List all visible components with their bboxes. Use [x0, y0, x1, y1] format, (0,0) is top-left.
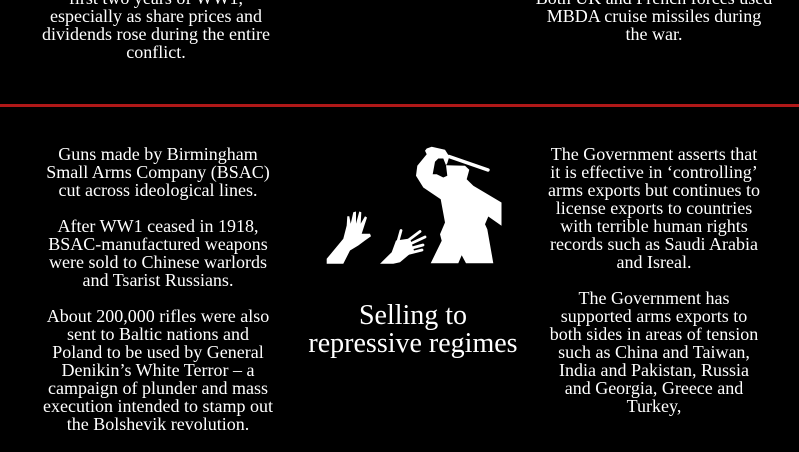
text block: left column, BSAC guns: execution intended to stamp out [43, 396, 273, 416]
text block: top left, share prices: especially as share prices and [50, 6, 262, 26]
text block: left column, BSAC guns: were sold to Chinese warlords [49, 252, 267, 272]
text block: left column, BSAC guns [43, 144, 273, 434]
text block: left column, BSAC guns: cut across ideological lines. [59, 180, 257, 200]
icon: baton [449, 156, 488, 170]
text block: top left, share prices: dividends rose during the entire [42, 24, 270, 44]
text block: right column, government arms exports: The Government asserts that [551, 144, 757, 164]
text block: left column, BSAC guns: About 200,000 rifles were also [47, 306, 269, 326]
text block: right column, government arms exports: and Isreal. [617, 252, 691, 272]
text block: top right, cruise missiles: the war. [626, 24, 682, 44]
text block: left column, BSAC guns: After WW1 ceased in 1918, [57, 216, 259, 236]
heading: selling to repressive regimes: Selling to [359, 300, 467, 331]
text block: right column, government arms exports: India and Pakistan, Russia [559, 360, 749, 380]
text block: right column, government arms exports: arms exports but continues to [548, 180, 760, 200]
text block: left column, BSAC guns: the Bolshevik revolution. [67, 414, 249, 434]
text block: right column, government arms exports: with terrible human rights [560, 216, 748, 236]
text block: right column, government arms exports: and Georgia, Greece and [565, 378, 743, 398]
text block: left column, BSAC guns: Guns made by Birmingham [58, 144, 258, 164]
text block: left column, BSAC guns: Poland to be used by General [52, 342, 264, 362]
text block: right column, government arms exports: Turkey, [627, 396, 681, 416]
text block: left column, BSAC guns: Denikin’s White Terror – a [61, 360, 255, 380]
text block: left column, BSAC guns: sent to Baltic nations and [67, 324, 249, 344]
text block: right column, government arms exports: supported arms exports to [561, 306, 747, 326]
red divider line [0, 104, 799, 107]
icon: police officer with baton and raised hands [326, 146, 502, 264]
icon: right raised hand [380, 230, 425, 264]
heading: selling to repressive regimes [308, 300, 518, 359]
text block: right column, government arms exports: license exports to countries [556, 198, 752, 218]
heading: selling to repressive regimes: repressive regimes [308, 328, 518, 359]
text block: left column, BSAC guns: BSAC-manufactured weapons [48, 234, 268, 254]
text block: top left, share prices [42, 0, 270, 62]
text block: right column, government arms exports: such as China and Taiwan, [558, 342, 750, 362]
text block: top left, share prices: conflict. [126, 42, 186, 62]
text block: right column, government arms exports: both sides in areas of tension [550, 324, 758, 344]
text block: left column, BSAC guns: campaign of plunder and mass [48, 378, 268, 398]
text block: right column, government arms exports: it is effective in ‘controlling’ [550, 162, 758, 182]
icon: left raised hand [327, 212, 371, 264]
text block: left column, BSAC guns: Small Arms Company (BSAC) [46, 162, 270, 182]
text block: top right, cruise missiles [536, 0, 772, 44]
text block: right column, government arms exports [548, 144, 760, 416]
text block: left column, BSAC guns: and Tsarist Russians. [83, 270, 233, 290]
text block: right column, government arms exports: The Government has [579, 288, 729, 308]
icon: officer silhouette [416, 147, 502, 263]
text block: top right, cruise missiles: MBDA cruise missiles during [547, 6, 761, 26]
text block: right column, government arms exports: records such as Saudi Arabia [550, 234, 758, 254]
